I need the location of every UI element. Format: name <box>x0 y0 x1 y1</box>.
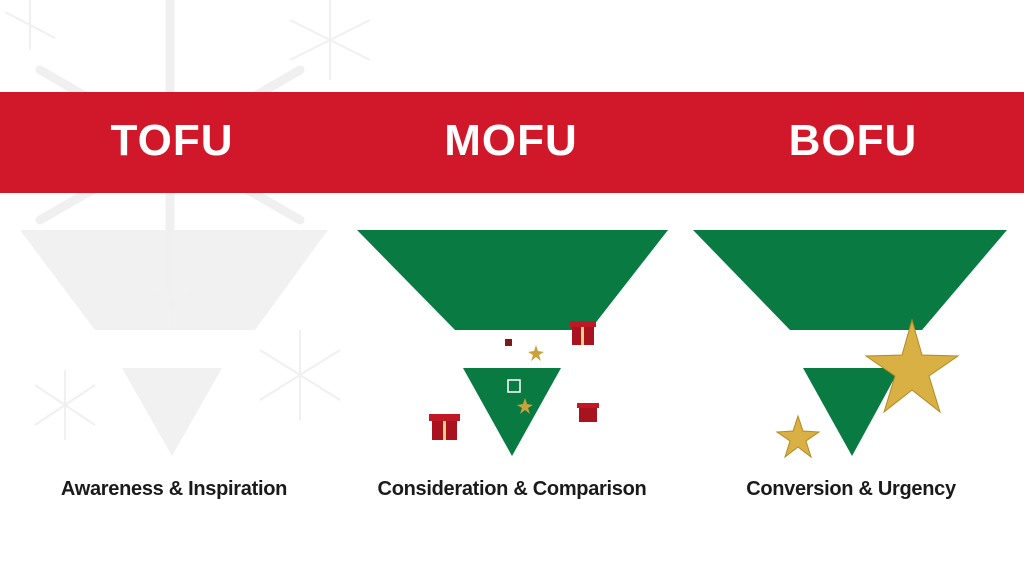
caption: BOFU: Conversion & Urgency <box>746 478 956 500</box>
icon: gold stars <box>777 320 958 457</box>
heading: MOFU: MOFU <box>444 116 578 165</box>
heading: TOFU: TOFU <box>111 116 233 165</box>
heading: BOFU: BOFU <box>789 116 917 165</box>
icon: gifts <box>429 321 599 440</box>
caption: MOFU: Consideration & Comparison <box>378 478 646 500</box>
caption: TOFU: Awareness & Inspiration <box>61 478 287 500</box>
red header band <box>0 92 1024 193</box>
